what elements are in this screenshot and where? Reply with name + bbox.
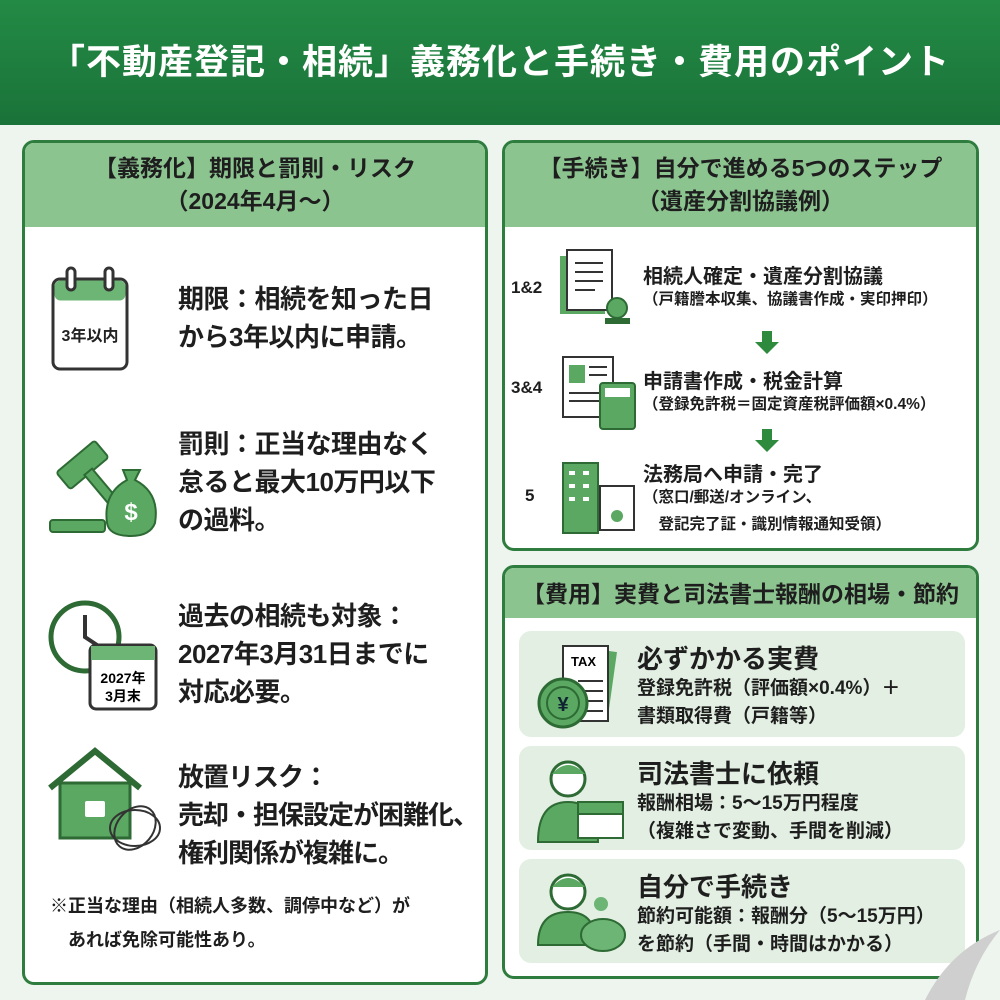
step 1&2: 相続人確定・遺産分割協議 bbox=[643, 266, 883, 288]
icon: tax and yen: TAX bbox=[571, 654, 596, 669]
text: past inheritance bbox=[178, 601, 429, 707]
step 3&4: 3&4 bbox=[511, 378, 542, 397]
icon: person and piggy bank bbox=[537, 874, 626, 952]
card: actual costs: 登録免許税（評価額×0.4%）＋ bbox=[637, 678, 900, 699]
text: deadline: から3年以内に申請。 bbox=[178, 322, 421, 352]
panel heading bbox=[505, 568, 976, 618]
arrow bbox=[755, 429, 779, 452]
card: scrivener bbox=[519, 746, 965, 850]
footnote: あれば免除可能性あり。 bbox=[68, 930, 266, 950]
card: scrivener: 報酬相場：5～15万円程度 bbox=[637, 793, 859, 814]
panel heading: 【義務化】期限と罰則・リスク bbox=[94, 155, 416, 181]
step 5: 法務局へ申請・完了 bbox=[643, 464, 823, 486]
title: 「不動産登記・相続」義務化と手続き・費用のポイント bbox=[50, 43, 950, 82]
step 1&2: 1&2 bbox=[511, 278, 542, 297]
text: neglect risk: 権利関係が複雑に。 bbox=[178, 838, 403, 868]
step 1&2 bbox=[511, 249, 938, 324]
card: actual costs bbox=[519, 631, 965, 737]
panel heading: 【手続き】自分で進める5つのステップ bbox=[539, 155, 942, 181]
panel heading: （遺産分割協議例） bbox=[637, 188, 844, 214]
card: scrivener: （複雑さで変動、手間を削減） bbox=[637, 821, 903, 842]
card: scrivener: 司法書士に依頼 bbox=[637, 759, 819, 789]
panel heading bbox=[505, 143, 976, 227]
icon: house with lock bbox=[48, 747, 161, 851]
step 5: 5 bbox=[525, 486, 534, 505]
text: penalty: 怠ると最大10万円以下 bbox=[178, 467, 435, 497]
title bbox=[0, 0, 1000, 125]
text: deadline bbox=[178, 284, 433, 352]
text: penalty: の過料。 bbox=[178, 505, 280, 535]
card: actual costs: 書類取得費（戸籍等） bbox=[637, 706, 827, 727]
panel: procedure steps bbox=[502, 140, 979, 551]
step 3&4: 申請書作成・税金計算 bbox=[643, 371, 843, 393]
text: neglect risk: 放置リスク： bbox=[178, 762, 328, 792]
icon: person and cash bbox=[537, 760, 624, 843]
icon: gavel and money bag: $ bbox=[124, 499, 138, 526]
icon: calendar: 3年以内 bbox=[62, 326, 118, 345]
step 5: （窓口/郵送/オンライン、 bbox=[643, 489, 821, 506]
icon: gavel and money bag bbox=[49, 440, 157, 537]
card: self-procedure: 節約可能額：報酬分（5～15万円） bbox=[637, 906, 935, 927]
footnote bbox=[50, 896, 410, 950]
icon: tax and yen bbox=[538, 645, 617, 728]
text: past inheritance: 過去の相続も対象： bbox=[178, 601, 408, 631]
icon: calendar bbox=[52, 266, 128, 370]
icon: documents and stamp bbox=[560, 249, 630, 324]
step 5: 登記完了証・識別情報通知受領） bbox=[658, 516, 891, 533]
arrow bbox=[755, 331, 779, 354]
icon: clock and calendar: 3月末 bbox=[105, 688, 141, 704]
card: self-procedure: を節約（手間・時間はかかる） bbox=[637, 934, 903, 955]
icon: clock and calendar bbox=[48, 600, 158, 710]
panel heading: 【費用】実費と司法書士報酬の相場・節約 bbox=[522, 581, 959, 607]
step 3&4 bbox=[511, 356, 935, 430]
text: deadline: 期限：相続を知った日 bbox=[178, 284, 433, 314]
panel heading bbox=[25, 143, 485, 227]
panel: obligation bbox=[22, 140, 488, 985]
panel heading: （2024年4月～） bbox=[166, 188, 344, 214]
text: neglect risk bbox=[178, 762, 478, 868]
card: self-procedure bbox=[519, 859, 965, 963]
icon: building and certificate bbox=[562, 462, 635, 534]
panel: costs bbox=[502, 565, 979, 979]
text: penalty: 罰則：正当な理由なく bbox=[178, 429, 433, 459]
text: past inheritance: 対応必要。 bbox=[178, 677, 306, 707]
card: actual costs: 必ずかかる実費 bbox=[637, 644, 819, 674]
text: past inheritance: 2027年3月31日までに bbox=[178, 639, 429, 669]
icon: tax and yen: ¥ bbox=[557, 694, 569, 716]
card: self-procedure: 自分で手続き bbox=[637, 872, 793, 902]
icon: form and calculator bbox=[562, 356, 636, 430]
text: neglect risk: 売却・担保設定が困難化、 bbox=[178, 800, 478, 830]
page curl bbox=[925, 930, 1000, 1000]
step 3&4: （登録免許税＝固定資産税評価額×0.4%） bbox=[643, 396, 935, 413]
step 1&2: （戸籍謄本収集、協議書作成・実印押印） bbox=[643, 291, 938, 308]
icon: clock and calendar: 2027年 bbox=[100, 670, 146, 686]
footnote: ※正当な理由（相続人多数、調停中など）が bbox=[50, 896, 410, 916]
step 5 bbox=[525, 462, 891, 534]
text: penalty bbox=[178, 429, 435, 535]
